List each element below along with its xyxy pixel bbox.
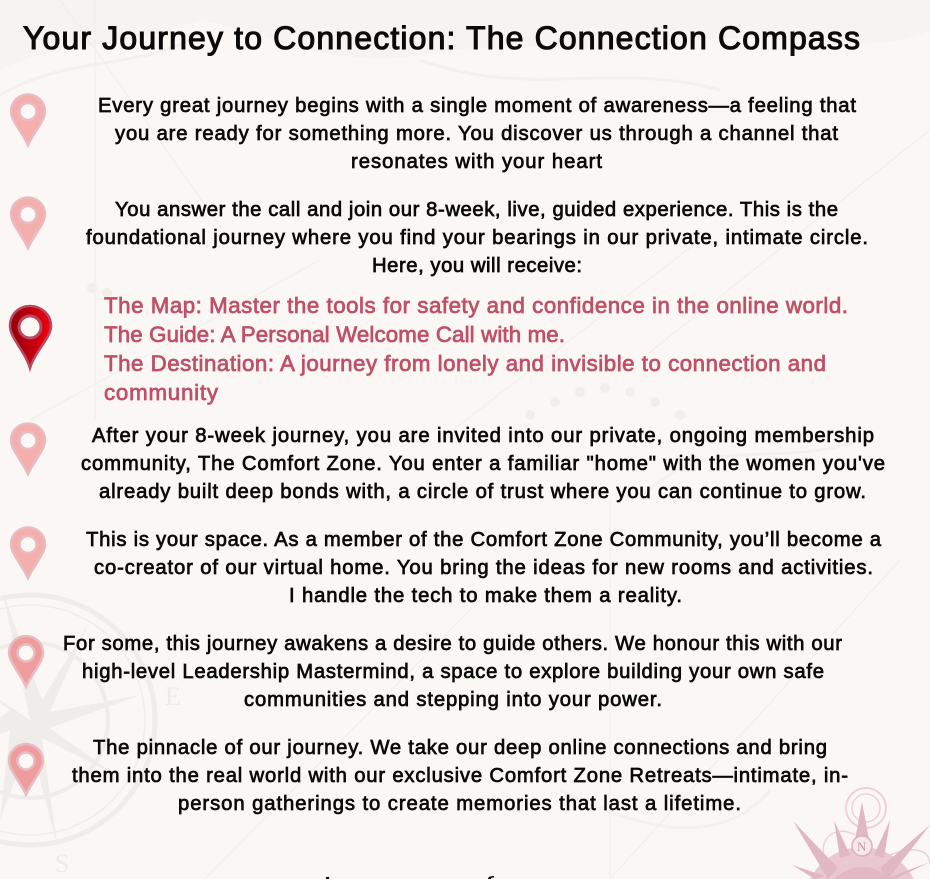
clipped heading tops at bottom edge <box>326 876 494 879</box>
icon: map pin 6 <box>9 636 43 686</box>
icon: map pin 4 <box>11 424 45 474</box>
text block: membership <box>81 425 885 503</box>
text block: membership: community, The Comfort Zone. You enter a familiar "home" with the women you've <box>81 453 885 475</box>
text block: answer the call: You answer the call and join our 8-week, live, guided experience. This is the <box>115 199 838 221</box>
icon: map pin 7 <box>9 744 43 794</box>
highlighted list: what you receive: The Guide: A Personal Welcome Call with me. <box>104 322 565 347</box>
icon: active red map pin <box>10 306 51 368</box>
text block: leadership <box>63 633 842 711</box>
text block: answer the call: Here, you will receive: <box>372 255 582 277</box>
compass rose: bottom right pink <box>792 788 930 879</box>
text block: your space: I handle the tech to make them a reality. <box>289 585 682 607</box>
text block: awareness: you are ready for something more. You discover us through a channel that <box>115 123 838 145</box>
highlighted list: what you receive: The Destination: A journey from lonely and invisible to connection and <box>104 351 826 376</box>
text block: answer the call <box>86 199 868 277</box>
text block: retreats <box>72 737 848 815</box>
icon: map pin 1 <box>11 94 45 145</box>
text block: leadership: For some, this journey awakens a desire to guide others. We honour this with our <box>63 633 842 655</box>
text block: leadership: communities and stepping into your power. <box>244 689 662 711</box>
text block: awareness: resonates with your heart <box>351 151 602 173</box>
text block: your space: co-creator of our virtual home. You bring the ideas for new rooms and activities. <box>94 557 873 579</box>
highlighted list: what you receive: The Map: Master the tools for safety and confidence in the online world. <box>104 293 848 318</box>
icon: map pin 2 <box>11 198 45 248</box>
text block: membership: After your 8-week journey, you are invited into our private, ongoing membership <box>92 425 874 447</box>
compass rose: left background: S <box>55 849 69 878</box>
text block: retreats: The pinnacle of our journey. We take our deep online connections and bring <box>93 737 827 759</box>
highlighted list: what you receive: community <box>104 380 219 405</box>
text block: retreats: them into the real world with our exclusive Comfort Zone Retreats—intimate, in- <box>72 765 848 787</box>
text block: answer the call: foundational journey where you find your bearings in our private, intimate circle. <box>86 227 868 249</box>
text block: your space: This is your space. As a member of the Comfort Zone Community, you’ll become a <box>86 529 882 551</box>
text block: your space <box>86 529 882 607</box>
compass rose: left background: E <box>165 682 181 711</box>
text block: membership: already built deep bonds with, a circle of trust where you can continue to grow. <box>99 481 866 503</box>
text block: leadership: high-level Leadership Mastermind, a space to explore building your own safe <box>82 661 824 683</box>
compass rose: left background <box>0 590 181 878</box>
text block: retreats: person gatherings to create memories that last a lifetime. <box>178 793 741 815</box>
compass rose: bottom right pink: N <box>857 839 867 854</box>
title: Your Journey to Connection: The Connection Compass <box>23 20 860 56</box>
text block: awareness: Every great journey begins with a single moment of awareness—a feeling that <box>98 95 856 117</box>
icon: map pin 5 <box>11 528 45 578</box>
text block: awareness <box>98 95 856 173</box>
highlighted list: what you receive <box>104 293 848 405</box>
